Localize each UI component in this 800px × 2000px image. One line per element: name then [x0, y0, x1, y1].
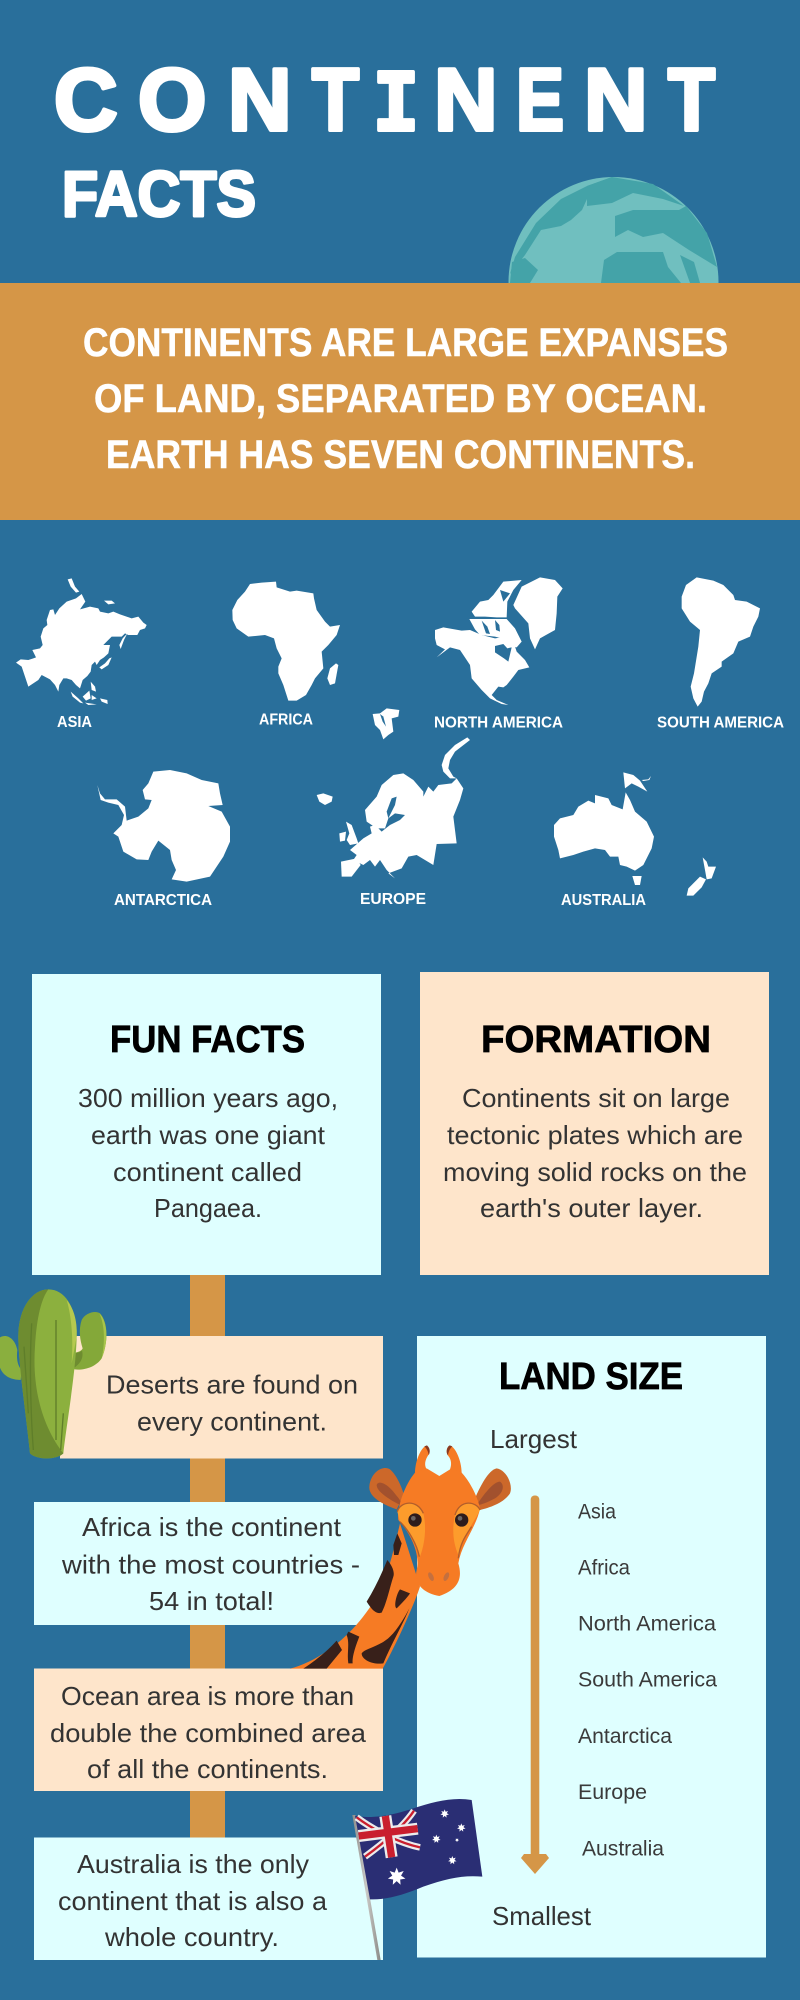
sign: australia fact: continent that is also a — [58, 1886, 328, 1916]
label: ANTARCTICA: ANTARCTICA — [114, 892, 212, 909]
text: formation body: earth's outer layer. — [480, 1193, 703, 1223]
label: NORTH AMERICA: NORTH AMERICA — [434, 714, 563, 732]
continent: Africa — [232, 582, 340, 728]
title: CONTINENT: T — [312, 50, 359, 149]
continent: Europe — [317, 737, 470, 908]
title: CONTINENT: O — [138, 50, 206, 149]
heading: LAND SIZE: LAND SIZE — [499, 1356, 683, 1398]
giraffe ears — [369, 1468, 511, 1510]
giraffe eyes — [408, 1513, 468, 1527]
sign: australia fact: Australia is the only — [77, 1849, 309, 1879]
label: ASIA: ASIA — [57, 714, 92, 731]
text: fun facts body: continent called — [113, 1157, 302, 1187]
list: continents by size: South America — [578, 1668, 717, 1692]
banner: intro — [0, 283, 800, 520]
list: continents by size: Asia — [578, 1500, 616, 1524]
label: Smallest: Smallest — [492, 1901, 592, 1931]
list: continents by size: Europe — [578, 1781, 647, 1804]
continent: South America — [657, 577, 784, 732]
giraffe head — [398, 1468, 480, 1596]
text: fun facts body: 300 million years ago, — [78, 1083, 338, 1113]
list: continents by size: Australia — [582, 1838, 664, 1860]
title: CONTINENT: E — [516, 50, 564, 149]
sign: africa fact — [34, 1502, 383, 1625]
list: continents by size: North America — [578, 1612, 716, 1636]
flag pole — [352, 1815, 381, 1960]
panel: fun facts — [32, 974, 381, 1275]
sign: africa fact: with the most countries - — [61, 1550, 360, 1580]
label: AFRICA: AFRICA — [259, 712, 313, 728]
continent: Asia — [16, 578, 147, 731]
arrow: largest to smallest — [521, 1496, 549, 1874]
list: continents by size: Antarctica — [578, 1725, 672, 1748]
text: formation body: tectonic plates which are — [447, 1120, 743, 1150]
text: formation body — [443, 1083, 747, 1223]
sign: africa fact: Africa is the continent — [82, 1512, 342, 1542]
icon: giraffe — [290, 1445, 511, 1669]
text: fun facts body: earth was one giant — [91, 1120, 326, 1150]
title: CONTINENT: N — [434, 50, 498, 149]
text: fun facts body: Pangaea. — [154, 1193, 262, 1223]
island: Svalbard — [373, 708, 399, 739]
label: SOUTH AMERICA: SOUTH AMERICA — [657, 714, 784, 732]
sign: ocean fact: Ocean area is more than — [61, 1681, 354, 1711]
panel: formation — [420, 972, 769, 1275]
list: continents by size — [578, 1500, 717, 1860]
text: formation body: moving solid rocks on the — [443, 1157, 747, 1187]
continent: North America — [434, 577, 563, 732]
title: CONTINENT: N — [228, 50, 292, 149]
subtitle: FACTS: FACTS — [62, 158, 256, 230]
title: CONTINENT: N — [584, 50, 648, 149]
heading: FUN FACTS: FUN FACTS — [110, 1019, 305, 1061]
giraffe nostrils — [427, 1571, 450, 1582]
sign: africa fact: 54 in total! — [149, 1586, 274, 1616]
heading: FORMATION: FORMATION — [481, 1019, 711, 1061]
intro line 3: EARTH HAS SEVEN CONTINENTS. — [106, 433, 695, 477]
label: Largest: Largest — [490, 1424, 578, 1454]
signpost: vertical post — [190, 1275, 225, 1840]
giraffe eye patches — [397, 1503, 480, 1557]
intro line 2: OF LAND, SEPARATED BY OCEAN. — [94, 377, 707, 421]
sign: deserts fact — [60, 1336, 383, 1458]
sign: australia fact: whole country. — [104, 1922, 279, 1952]
continent: Antarctica — [97, 770, 230, 909]
flag cloth — [355, 1799, 482, 1899]
title: CONTINENT: T — [668, 50, 715, 149]
text: fun facts body — [78, 1083, 338, 1223]
flag stars — [388, 1809, 466, 1885]
panel: land size — [417, 1336, 766, 1958]
icon: australian flag — [352, 1799, 482, 1960]
icon: cactus — [0, 1289, 106, 1458]
label: EUROPE: EUROPE — [360, 891, 426, 908]
sign: deserts fact: Deserts are found on — [106, 1370, 358, 1400]
giraffe horns — [415, 1445, 462, 1473]
giraffe brows — [397, 1503, 480, 1558]
sign: ocean fact — [34, 1668, 383, 1791]
icon: globe — [508, 177, 718, 387]
sign: deserts fact: every continent. — [137, 1406, 327, 1436]
title: CONTINENT — [54, 50, 715, 157]
sign: ocean fact: double the combined area — [50, 1718, 367, 1748]
giraffe neck — [290, 1523, 420, 1669]
label: AUSTRALIA: AUSTRALIA — [561, 892, 646, 909]
sign: ocean fact: of all the continents. — [87, 1754, 328, 1784]
title: CONTINENT: I — [373, 58, 419, 157]
list: continents by size: Africa — [578, 1556, 630, 1580]
title: CONTINENT: C — [54, 50, 118, 149]
text: formation body: Continents sit on large — [462, 1083, 730, 1113]
sign: australia fact — [34, 1838, 383, 1960]
intro line 1: CONTINENTS ARE LARGE EXPANSES — [83, 321, 728, 365]
continent: Australia — [554, 772, 716, 909]
giraffe spots — [303, 1533, 410, 1669]
union jack — [357, 1811, 420, 1857]
